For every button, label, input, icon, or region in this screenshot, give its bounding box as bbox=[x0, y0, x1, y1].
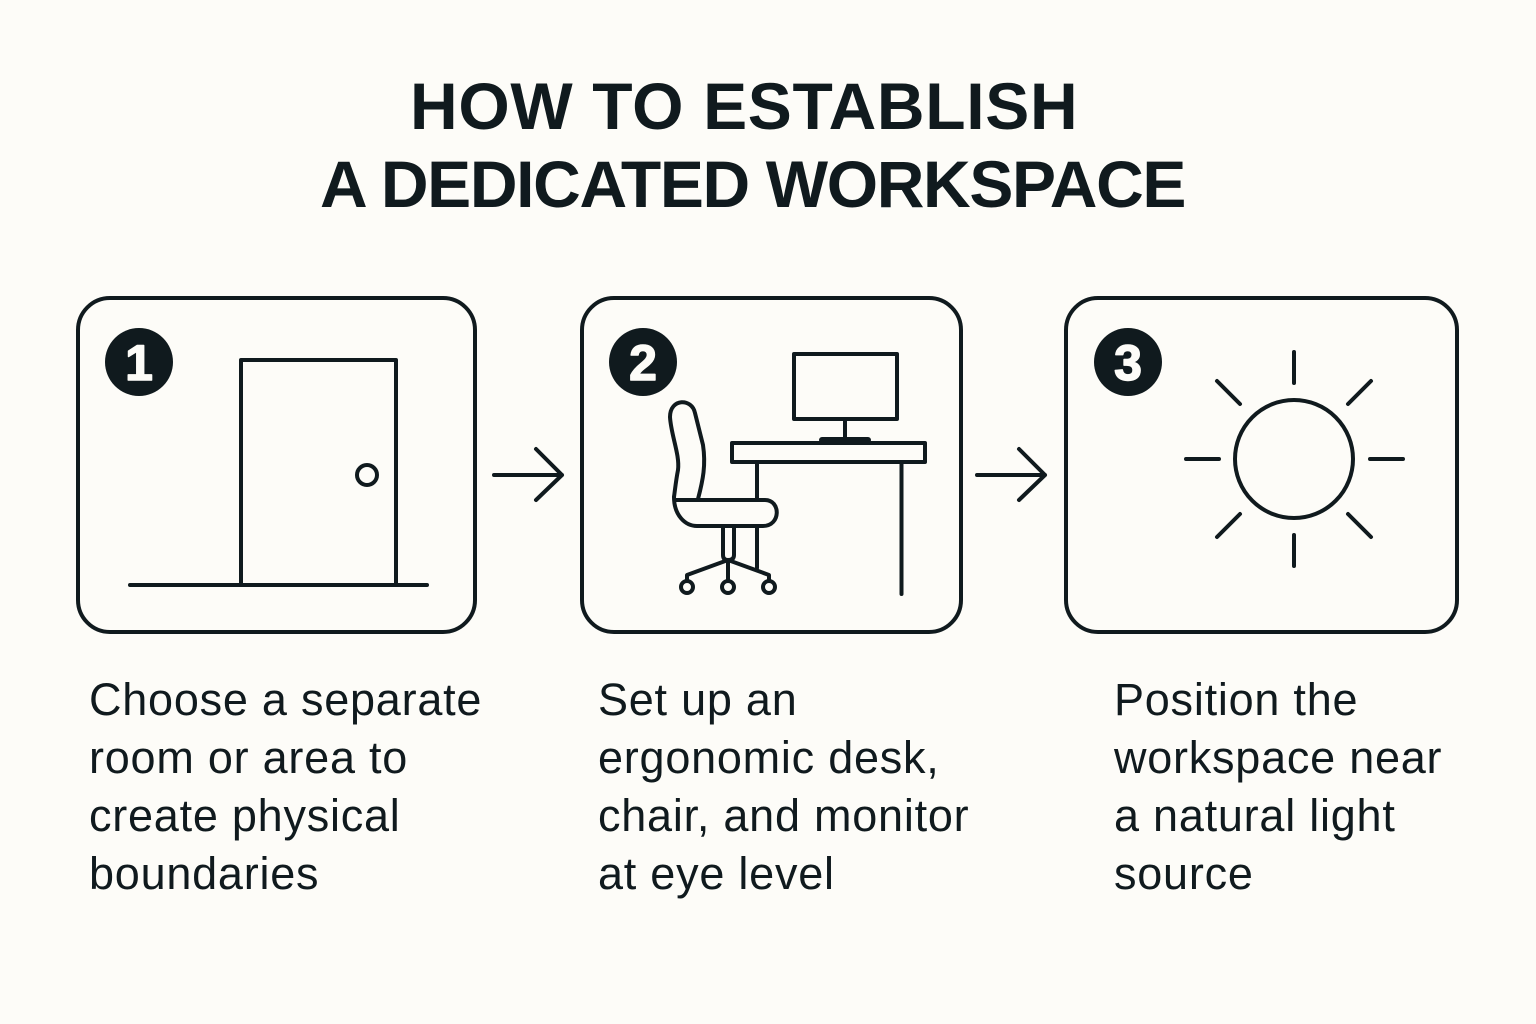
icon: chair bbox=[670, 402, 777, 593]
text: step 1 description: room or area to bbox=[89, 732, 408, 783]
badge: number 1: 1 bbox=[125, 335, 153, 391]
badge: number 1 bbox=[105, 328, 173, 396]
text: step 3 description: a natural light bbox=[1114, 790, 1396, 841]
badge: number 3: 3 bbox=[1114, 335, 1142, 391]
badge: number 2 bbox=[609, 328, 677, 396]
text: step 2 description: chair, and monitor bbox=[598, 790, 969, 841]
text: step 2 description: ergonomic desk, bbox=[598, 732, 940, 783]
icon: monitor bbox=[794, 354, 897, 440]
icon: desk bbox=[732, 443, 925, 594]
panel: step 1 door bbox=[78, 298, 475, 632]
text: step 3 description bbox=[1114, 674, 1442, 899]
badge: number 3 bbox=[1094, 328, 1162, 396]
title: HOW TO ESTABLISH bbox=[410, 69, 1078, 143]
text: step 1 description: Choose a separate bbox=[89, 674, 482, 725]
panel: step 3 sun bbox=[1066, 298, 1457, 632]
title: A DEDICATED WORKSPACE bbox=[320, 147, 1185, 221]
text: step 1 description: create physical bbox=[89, 790, 401, 841]
title bbox=[320, 69, 1185, 221]
text: step 2 description bbox=[598, 674, 969, 899]
text: step 1 description bbox=[89, 674, 482, 899]
icon: door bbox=[130, 360, 427, 585]
arrow: step 1 to 2 bbox=[494, 449, 562, 500]
text: step 2 description: at eye level bbox=[598, 848, 835, 899]
text: step 3 description: Position the bbox=[1114, 674, 1358, 725]
panel: step 2 desk bbox=[582, 298, 961, 632]
text: step 1 description: boundaries bbox=[89, 848, 319, 899]
text: step 3 description: workspace near bbox=[1114, 732, 1442, 783]
icon: sun bbox=[1186, 352, 1403, 566]
badge: number 2: 2 bbox=[629, 335, 657, 391]
text: step 3 description: source bbox=[1114, 848, 1254, 899]
arrow: step 2 to 3 bbox=[977, 449, 1045, 500]
text: step 2 description: Set up an bbox=[598, 674, 798, 725]
